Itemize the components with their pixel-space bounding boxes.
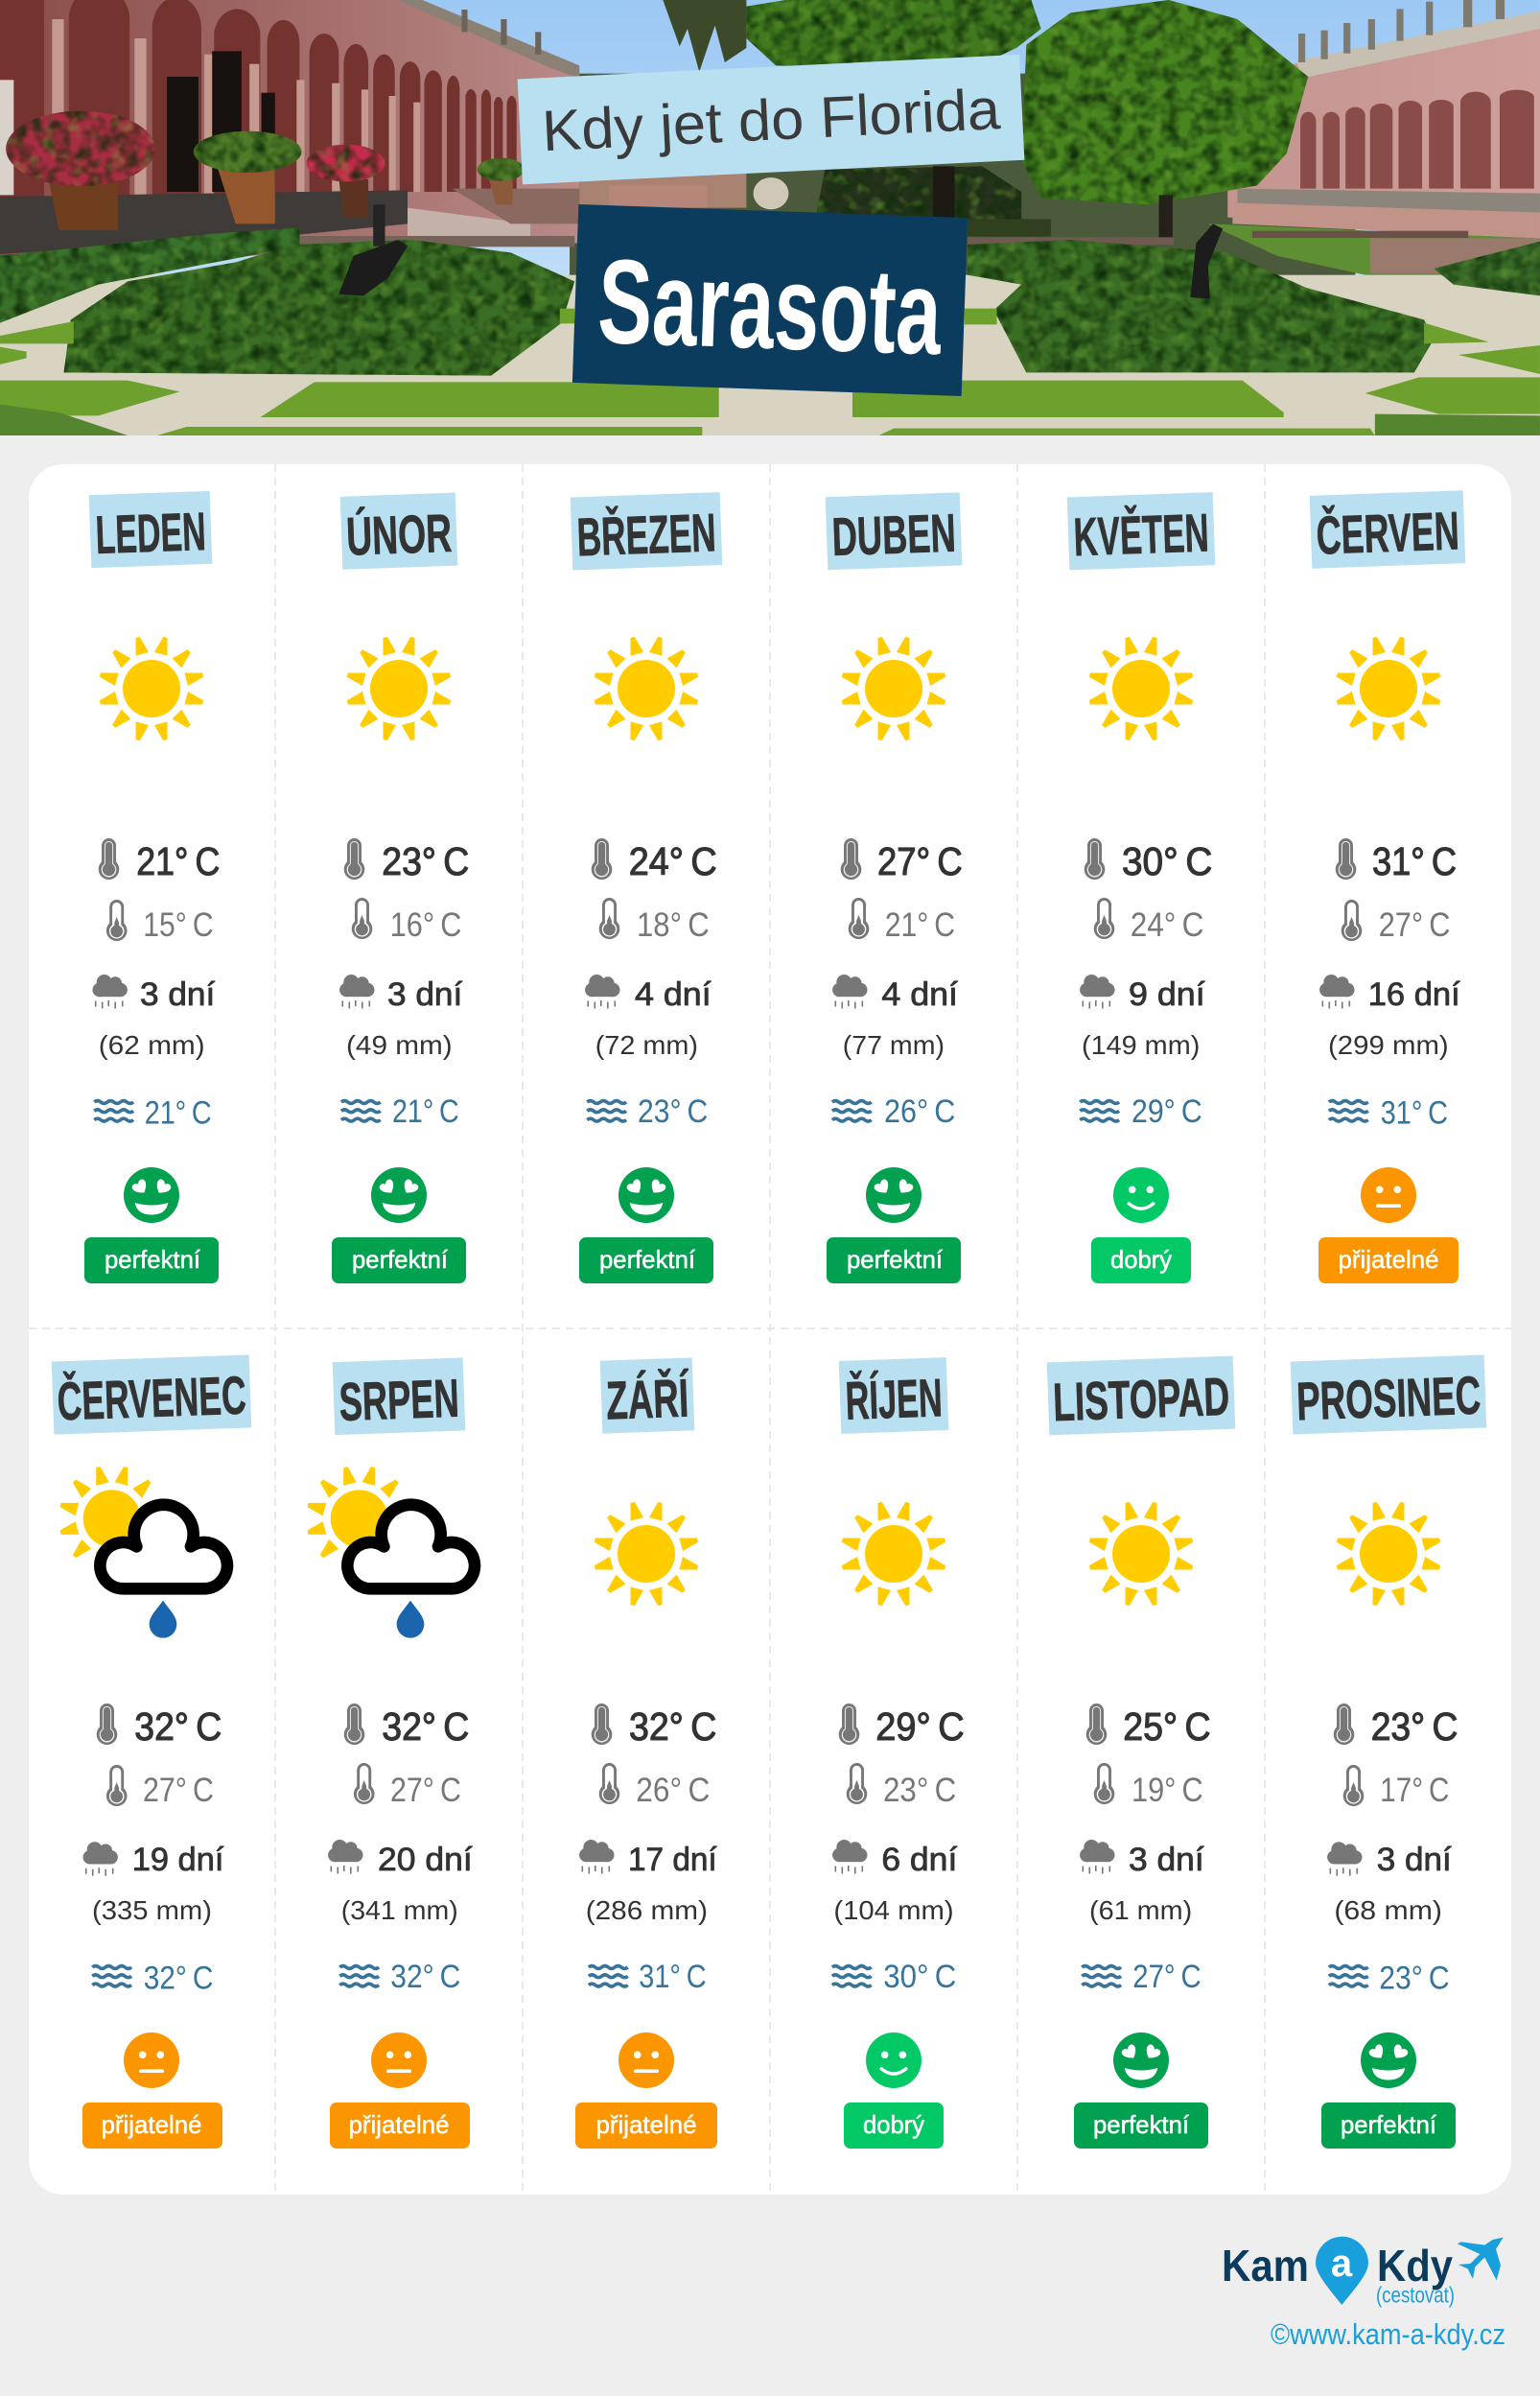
icon: rain cloud: [579, 1840, 614, 1874]
icon: low thermometer: [354, 1763, 374, 1804]
icon: rain cloud: [1319, 975, 1354, 1009]
high temperature: 24° C: [629, 839, 717, 883]
low temperature: 15° C: [143, 906, 214, 944]
icon: high thermometer: [592, 1703, 612, 1745]
high temperature: 25° C: [1123, 1704, 1211, 1749]
icon: water waves: [1329, 1101, 1368, 1121]
icon: low thermometer: [599, 1763, 619, 1804]
month: ŘÍJEN: [832, 1357, 965, 2149]
icon: high thermometer: [592, 838, 612, 880]
icon: rating face: [618, 2032, 674, 2088]
month: PROSINEC: [1291, 1354, 1486, 2149]
logo tagline: (cestovat): [1376, 2283, 1455, 2308]
rating badge: [332, 1237, 466, 1283]
icon: water waves: [339, 1966, 379, 1986]
month: ÚNOR: [332, 493, 469, 1283]
icon: high thermometer: [344, 1703, 364, 1745]
water temperature: 29° C: [1132, 1093, 1202, 1130]
low temperature: 18° C: [637, 906, 710, 944]
icon: high thermometer: [1334, 1703, 1354, 1745]
month: DUBEN: [826, 492, 963, 1283]
rating badge: perfektní: [1341, 2110, 1437, 2139]
rating badge: [330, 2102, 470, 2149]
high temperature: 21° C: [136, 839, 220, 883]
precipitation: (72 mm): [595, 1030, 698, 1060]
water temperature: 32° C: [144, 1961, 213, 1997]
icon: sun: [1336, 636, 1441, 741]
icon: low thermometer: [1094, 898, 1114, 939]
water temperature: 21° C: [145, 1095, 212, 1132]
icon: low thermometer: [352, 898, 372, 939]
rating badge: přijatelné: [349, 2110, 449, 2139]
icon: low thermometer: [599, 898, 619, 939]
icon: water waves: [341, 1101, 381, 1121]
icon: sun: [1336, 1501, 1441, 1607]
month: ČERVEN: [1310, 490, 1465, 1283]
precipitation: (341 mm): [341, 1895, 458, 1925]
rating badge: [1091, 1237, 1191, 1283]
high temperature: 29° C: [875, 1704, 965, 1749]
high temperature: 32° C: [134, 1704, 222, 1749]
icon: sun: [594, 1501, 699, 1607]
rating badge: přijatelné: [102, 2110, 201, 2139]
low temperature: 16° C: [390, 906, 461, 944]
rainy days: 9 dní: [1129, 976, 1205, 1013]
logo letter: a: a: [1331, 2243, 1353, 2285]
rainy days: 4 dní: [881, 976, 959, 1013]
month label: [571, 492, 722, 570]
month: KVĚTEN: [1067, 492, 1215, 1283]
low temperature: 17° C: [1380, 1772, 1449, 1809]
month label: BŘEZEN: [576, 502, 717, 567]
low temperature: 27° C: [390, 1772, 461, 1809]
panel: monthly climate card: [29, 464, 1511, 2195]
banner: Sarasota: [572, 204, 968, 396]
icon: sun: [1088, 636, 1194, 741]
rating badge: [1074, 2102, 1208, 2149]
water temperature: 30° C: [883, 1959, 956, 1995]
rating badge: [844, 2102, 944, 2149]
icon: rating face: [124, 2032, 179, 2088]
high temperature: 23° C: [382, 839, 469, 883]
icon: rain cloud: [832, 975, 867, 1009]
month label: KVĚTEN: [1073, 502, 1210, 567]
icon: water waves: [92, 1966, 131, 1986]
month label: ČERVENEC: [57, 1365, 247, 1431]
rating badge: [575, 2102, 717, 2149]
month label: [1291, 1354, 1486, 1435]
low temperature: 26° C: [636, 1772, 710, 1809]
icon: water waves: [589, 1966, 628, 1986]
high temperature: 31° C: [1372, 839, 1457, 883]
rainy days: 6 dní: [881, 1842, 958, 1878]
precipitation: (104 mm): [833, 1895, 954, 1925]
icon: high thermometer: [1085, 838, 1105, 880]
high temperature: 27° C: [877, 839, 963, 883]
month label: ŘÍJEN: [845, 1367, 944, 1431]
icon: water waves: [1329, 1966, 1368, 1986]
icon: sun: [594, 636, 699, 741]
icon: sun: [346, 636, 452, 741]
month label: [52, 1354, 251, 1435]
icon: high thermometer: [97, 1703, 117, 1745]
month label: [89, 491, 212, 568]
icon: rating face: [866, 1167, 922, 1223]
icon: rain cloud: [1327, 1842, 1362, 1876]
rating badge: perfektní: [1093, 2110, 1190, 2139]
icon: rain cloud: [328, 1840, 362, 1874]
icon: rain cloud: [1080, 1840, 1114, 1874]
icon: water waves: [587, 1101, 626, 1121]
month label: SRPEN: [338, 1368, 460, 1432]
water temperature: 21° C: [392, 1093, 459, 1130]
low temperature: 23° C: [883, 1772, 956, 1809]
month label: [600, 1357, 694, 1434]
precipitation: (299 mm): [1328, 1030, 1449, 1060]
rating badge: [1321, 2102, 1456, 2149]
precipitation: (77 mm): [843, 1030, 945, 1060]
low temperature: 19° C: [1132, 1772, 1203, 1809]
website url: ©www.kam-a-kdy.cz: [1271, 2317, 1505, 2351]
rating badge: perfektní: [599, 1245, 696, 1274]
icon: water waves: [1082, 1966, 1121, 1986]
rating badge: [827, 1237, 961, 1283]
high temperature: 30° C: [1122, 839, 1212, 883]
icon: rating face: [371, 2032, 427, 2088]
month: SRPEN: [306, 1357, 475, 2149]
water temperature: 23° C: [1379, 1961, 1450, 1997]
water temperature: 26° C: [884, 1093, 955, 1130]
icon: rating face: [866, 2032, 922, 2088]
rating badge: [579, 1237, 713, 1283]
icon: low thermometer: [106, 1765, 127, 1806]
rainy days: 19 dní: [132, 1842, 224, 1878]
month label: [1067, 492, 1215, 570]
icon: sun: [99, 636, 204, 741]
water temperature: 31° C: [1381, 1095, 1448, 1132]
month: ČERVENEC: [52, 1354, 251, 2149]
rainy days: 3 dní: [1377, 1842, 1452, 1878]
rainy days: 20 dní: [378, 1842, 473, 1878]
month label: LEDEN: [95, 501, 207, 565]
banner: Kdy jet do Florida: Kdy jet do Florida: [541, 77, 1002, 163]
rating badge: dobrý: [1110, 1245, 1172, 1274]
logo word: Kdy: Kdy: [1377, 2241, 1453, 2290]
water temperature: 23° C: [638, 1093, 708, 1130]
month label: [826, 492, 962, 570]
water temperature: 27° C: [1132, 1959, 1202, 1995]
rating badge: dobrý: [863, 2110, 924, 2139]
icon: high thermometer: [1086, 1703, 1107, 1745]
rainy days: 3 dní: [140, 976, 216, 1013]
month label: ÚNOR: [345, 503, 453, 567]
icon: high thermometer: [344, 838, 364, 880]
icon: sun, cloud and rain drop: [58, 1466, 227, 1638]
icon: water waves: [832, 1966, 872, 1986]
precipitation: (61 mm): [1089, 1895, 1192, 1925]
precipitation: (286 mm): [586, 1895, 708, 1925]
icon: water waves: [94, 1101, 133, 1121]
month label: DUBEN: [831, 503, 957, 567]
icon: airplane: [1458, 2238, 1504, 2280]
icon: low thermometer: [106, 900, 127, 941]
icon: rain cloud: [1080, 975, 1114, 1009]
rainy days: 3 dní: [387, 976, 463, 1013]
water temperature: 32° C: [390, 1959, 460, 1995]
low temperature: 24° C: [1131, 906, 1203, 944]
icon: rating face: [1361, 2032, 1416, 2088]
icon: rating face: [371, 1167, 427, 1223]
icon: sun: [841, 636, 946, 741]
icon: water waves: [832, 1101, 872, 1121]
banner: Kdy jet do Florida: [518, 55, 1024, 184]
month: ZÁŘÍ: [575, 1357, 717, 2149]
month label: [1310, 490, 1465, 569]
month label: ZÁŘÍ: [605, 1367, 690, 1430]
month label: [1047, 1356, 1235, 1435]
rainy days: 17 dní: [628, 1842, 717, 1878]
hero photo: garden courtyard: [0, 0, 1540, 435]
water temperature: 31° C: [639, 1959, 707, 1995]
rating badge: [1318, 1237, 1458, 1283]
month label: [340, 493, 457, 570]
icon: rain cloud: [92, 975, 128, 1009]
icon: low thermometer: [1343, 1765, 1364, 1806]
icon: rain cloud: [832, 1840, 867, 1874]
high temperature: 32° C: [382, 1704, 469, 1749]
icon: low thermometer: [1342, 900, 1362, 941]
icon: low thermometer: [1094, 1763, 1114, 1804]
icon: rating face: [124, 1167, 179, 1223]
icon: rating face: [1113, 1167, 1169, 1223]
icon: high thermometer: [839, 1703, 859, 1745]
icon: rain cloud: [585, 975, 619, 1009]
icon: high thermometer: [99, 838, 119, 880]
precipitation: (49 mm): [346, 1030, 453, 1060]
icon: rating face: [618, 1167, 674, 1223]
rainy days: 3 dní: [1129, 1842, 1204, 1878]
precipitation: (335 mm): [92, 1895, 212, 1925]
icon: rain cloud: [82, 1842, 118, 1876]
icon: high thermometer: [841, 838, 861, 880]
icon: high thermometer: [1336, 838, 1356, 880]
icon: sun, cloud and rain drop: [306, 1466, 475, 1638]
rating badge: [84, 1237, 219, 1283]
icon: water waves: [1080, 1101, 1119, 1121]
precipitation: (68 mm): [1334, 1895, 1442, 1925]
low temperature: 27° C: [1379, 906, 1450, 944]
icon: low thermometer: [847, 1763, 867, 1804]
logo: Kam a Kdy: [1222, 2237, 1504, 2308]
month label: [333, 1357, 465, 1435]
month label: ČERVEN: [1316, 500, 1460, 566]
rainy days: 4 dní: [635, 976, 712, 1013]
low temperature: 21° C: [885, 906, 955, 944]
icon: sun: [1088, 1501, 1194, 1607]
icon: location pin: [1316, 2237, 1368, 2305]
icon: rating face: [1113, 2032, 1169, 2088]
icon: rating face: [1361, 1167, 1416, 1223]
high temperature: 23° C: [1371, 1704, 1458, 1749]
banner: Sarasota: Sarasota: [595, 235, 945, 380]
rating badge: perfektní: [352, 1245, 449, 1274]
precipitation: (149 mm): [1082, 1030, 1200, 1060]
rainy days: 16 dní: [1368, 976, 1460, 1013]
icon: low thermometer: [849, 898, 869, 939]
icon: rain cloud: [339, 975, 374, 1009]
high temperature: 32° C: [629, 1704, 716, 1749]
month label: [839, 1357, 948, 1434]
month: LEDEN: [84, 491, 220, 1283]
rating badge: [82, 2102, 222, 2149]
precipitation: (62 mm): [99, 1030, 205, 1060]
icon: sun: [841, 1501, 946, 1607]
rating badge: perfektní: [847, 1245, 944, 1274]
rating badge: přijatelné: [596, 2110, 696, 2139]
rating badge: přijatelné: [1339, 1245, 1438, 1274]
month: BŘEZEN: [571, 492, 722, 1283]
logo word: Kam: Kam: [1222, 2241, 1309, 2290]
low temperature: 27° C: [143, 1772, 214, 1809]
rating badge: perfektní: [105, 1245, 201, 1274]
month label: LISTOPAD: [1052, 1366, 1230, 1432]
month: LISTOPAD: [1047, 1356, 1235, 2149]
